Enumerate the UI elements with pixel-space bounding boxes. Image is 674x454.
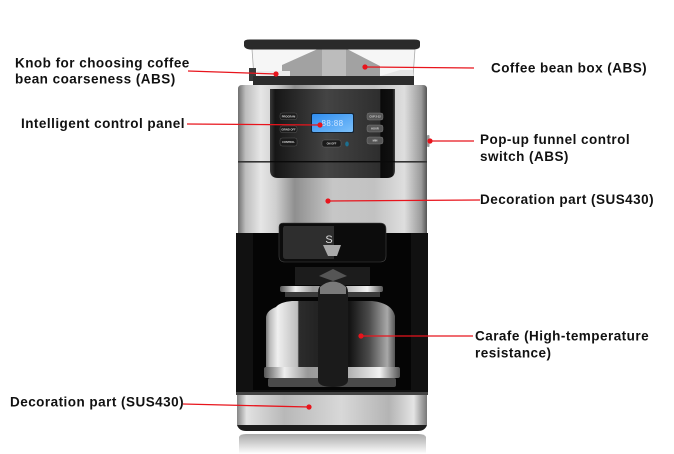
panel buttons: CONTROL: [282, 140, 295, 144]
panel buttons: ON OFF: [327, 142, 337, 146]
bean hopper: [244, 40, 420, 85]
callout: bean box: [362, 64, 474, 70]
label: decoration part lower: Decoration part (SUS430): [10, 394, 184, 410]
callout: decoration upper: [325, 198, 480, 204]
panel buttons: CUP 2-12: [369, 114, 381, 118]
control panel: [270, 89, 395, 178]
drip head panel: S: [325, 234, 333, 246]
label: carafe: Carafe (High-temperature: [475, 328, 649, 344]
callout: funnel switch: [427, 138, 474, 144]
label: knob: Knob for choosing coffee: [15, 56, 190, 70]
label: intelligent control panel: Intelligent control panel: [21, 116, 185, 131]
brew chamber: [236, 233, 428, 392]
carafe handle: [318, 282, 348, 387]
lower steel base: [236, 392, 428, 431]
callout lines: [183, 64, 480, 410]
drip head panel: [279, 223, 386, 285]
upper steel body: [238, 85, 427, 233]
callout: knob: [188, 71, 279, 77]
panel buttons: PROGRAM: [282, 114, 295, 118]
panel buttons: MIN: [373, 138, 377, 142]
label: coffee bean box: Coffee bean box (ABS): [491, 60, 647, 76]
pop-up funnel switch: [427, 135, 430, 147]
label: pop-up funnel control switch: switch (ABS): [480, 149, 569, 164]
callout: decoration lower: [183, 404, 312, 410]
callout: control panel: [187, 122, 323, 128]
callout: carafe: [358, 333, 473, 339]
panel buttons: GRIND OFF: [281, 128, 296, 132]
label: knob: bean coarseness (ABS): [15, 72, 176, 86]
panel buttons: [280, 113, 383, 147]
LCD display: 88:88: [321, 119, 344, 128]
label: carafe: resistance): [475, 346, 551, 360]
table reflection: [239, 434, 426, 454]
coffee machine illustration: [236, 40, 430, 454]
label: pop-up funnel control switch: Pop-up funnel control: [480, 132, 630, 147]
carafe: [264, 269, 400, 387]
label: decoration part upper: Decoration part (SUS430): [480, 192, 654, 207]
panel buttons: HOUR: [371, 126, 379, 130]
